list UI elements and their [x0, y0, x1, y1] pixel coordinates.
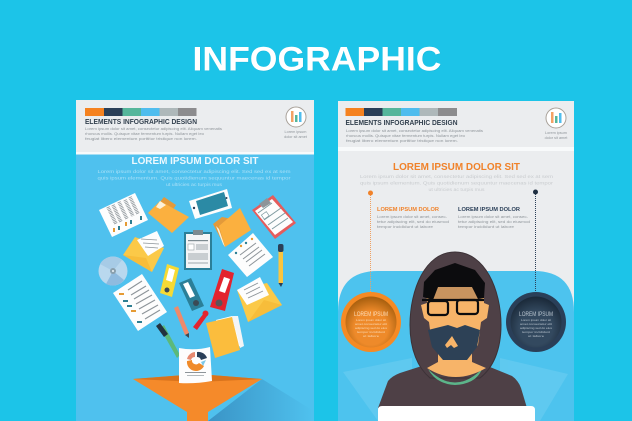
- green collar: [428, 369, 482, 385]
- navy callout circle: [506, 292, 566, 352]
- right page intro text: [360, 174, 554, 192]
- smartphone: [189, 189, 232, 219]
- navy callout circle: Lorem ipsum dolor sit: [521, 318, 551, 322]
- clipboard teal: [184, 230, 212, 270]
- navy column text: [458, 207, 530, 229]
- hair: [423, 263, 485, 300]
- neck: [427, 352, 486, 377]
- header text: feugiat libero elementum porttitor tristique non lorem.: [85, 137, 197, 141]
- icon caption: dolor sit amet: [284, 135, 308, 139]
- envelope left: [123, 231, 164, 272]
- mouth area: [445, 336, 458, 348]
- orange callout circle: adipiscing sed do eius: [355, 326, 388, 330]
- orange column text: tetur adipiscing elit, sed do eiusmod: [377, 220, 449, 224]
- header text: [85, 127, 222, 141]
- pencil orange: [174, 306, 189, 338]
- header heading: ELEMENTS INFOGRAPHIC DESIGN: [346, 118, 458, 127]
- blue backdrop: [338, 271, 574, 421]
- navy connector: [533, 190, 538, 292]
- orange callout circle: tempor incididunt: [357, 330, 385, 334]
- orange connector: [368, 190, 373, 292]
- binder yellow: [160, 264, 179, 297]
- header text: rhoncus mollis. Quisque vitae fermentum turpis. Nullam eget leo: [346, 134, 465, 138]
- navy column text: Lorem ipsum dolor sit amet, consec-: [458, 215, 529, 219]
- document left large: [113, 274, 167, 331]
- right page intro text: ut ultricies ac turpis mus: [428, 187, 485, 192]
- left page intro text: quis ipsum elementum. Quis quotidienum sequuntur maecenas id tempor: [98, 176, 291, 180]
- header text: [346, 129, 483, 143]
- colour palette strip: [85, 108, 196, 116]
- panel: left page: [76, 100, 314, 421]
- orange column text: Lorem ipsum dolor sit amet, consec-: [377, 215, 448, 219]
- sweatshirt body: [378, 365, 527, 408]
- left page header: [76, 100, 314, 154]
- right page heading: LOREM IPSUM DOLOR SIT: [393, 161, 521, 173]
- title: INFOGRAPHIC: [192, 40, 442, 78]
- glasses: [422, 300, 484, 315]
- right page intro text: quis ipsum elementum. Quis quotidienum sequuntur maecenas id tempor: [360, 180, 554, 186]
- pen yellow: [278, 244, 284, 287]
- white laptop: [378, 406, 535, 421]
- left page intro text: ut ultricies ac turpis mus: [166, 182, 223, 187]
- illustration: documents falling into funnel: [98, 189, 312, 421]
- navy callout circle: ut labore: [528, 334, 545, 338]
- navy column text: tempor incididunt ut labore: [458, 225, 514, 229]
- icon caption: Lorem ipsum: [545, 131, 567, 135]
- header text: rhoncus mollis. Quisque vitae fermentum turpis. Nullam eget leo: [85, 132, 204, 136]
- orange callout circle: LOREM IPSUM: [354, 312, 388, 318]
- red marker: [193, 310, 208, 330]
- navy callout circle: amet consectetur elit: [520, 322, 552, 326]
- folder yellow large: [206, 316, 244, 358]
- document right small: [228, 233, 273, 277]
- beard: [428, 325, 480, 360]
- orange callout circle: amet consectetur elit: [355, 322, 387, 326]
- hood: [410, 252, 501, 378]
- icon: chart badge: [286, 107, 306, 127]
- navy callout circle: tempor incididunt: [522, 330, 550, 334]
- funnel shadow: [208, 379, 312, 421]
- orange callout circle: [341, 292, 401, 352]
- forehead shade: [430, 287, 482, 300]
- navy callout circle: LOREM IPSUM: [519, 312, 553, 318]
- icon caption: [284, 130, 308, 139]
- orange column text: tempor incididunt ut labore: [377, 225, 433, 229]
- header text: Lorem ipsum dolor sit amet, consectetur adipiscing elit. Aliquam venenatis: [346, 129, 483, 133]
- clipboard red: [252, 195, 296, 239]
- title: INFOGRAPHIC: [193, 41, 442, 79]
- report sheet with donut chart: [179, 347, 212, 383]
- orange column text: [377, 207, 449, 229]
- face: [421, 290, 489, 358]
- compact disc: [98, 256, 128, 286]
- navy column text: tetur adipiscing elit, sed do eiusmod: [458, 220, 530, 224]
- icon caption: Lorem ipsum: [285, 130, 306, 134]
- pen green: [156, 323, 180, 358]
- binder red: [210, 269, 234, 311]
- orange callout circle: ut labore: [363, 334, 380, 338]
- panel: right page: [338, 101, 574, 421]
- header heading: ELEMENTS INFOGRAPHIC DESIGN: [85, 117, 197, 126]
- funnel: [133, 374, 262, 421]
- hooded hacker figure: [378, 252, 527, 408]
- icon caption: dolor sit amet: [545, 136, 568, 140]
- orange column text: LOREM IPSUM DOLOR: [377, 207, 439, 213]
- right page header: [346, 108, 568, 143]
- icon caption: [545, 131, 568, 140]
- light beams: [343, 358, 568, 421]
- header text: feugiat libero elementum porttitor tristique non lorem.: [346, 139, 458, 143]
- navy column text: LOREM IPSUM DOLOR: [458, 207, 520, 213]
- document with bar lines: [99, 193, 148, 237]
- orange callout circle: Lorem ipsum dolor sit: [356, 318, 386, 322]
- left page intro text: [98, 169, 291, 187]
- icon: chart badge: [546, 108, 566, 128]
- left page heading: LOREM IPSUM DOLOR SIT: [132, 155, 259, 167]
- header text: Lorem ipsum dolor sit amet, consectetur adipiscing elit. Aliquam venenatis: [85, 127, 222, 131]
- right page intro text: Lorem ipsum dolor sit amet, consectetur adipiscing elit. Sed sed ex at sem: [360, 174, 553, 179]
- folder orange right: [213, 208, 251, 247]
- colour palette strip: [346, 108, 457, 116]
- folder orange tilted: [148, 197, 189, 233]
- binder teal: [179, 278, 204, 311]
- left page intro text: Lorem ipsum dolor sit amet, consectetur adipiscing elit. Sed sed ex at sem: [98, 169, 291, 174]
- envelope right: [237, 277, 282, 322]
- navy callout circle: adipiscing sed do eius: [520, 326, 553, 330]
